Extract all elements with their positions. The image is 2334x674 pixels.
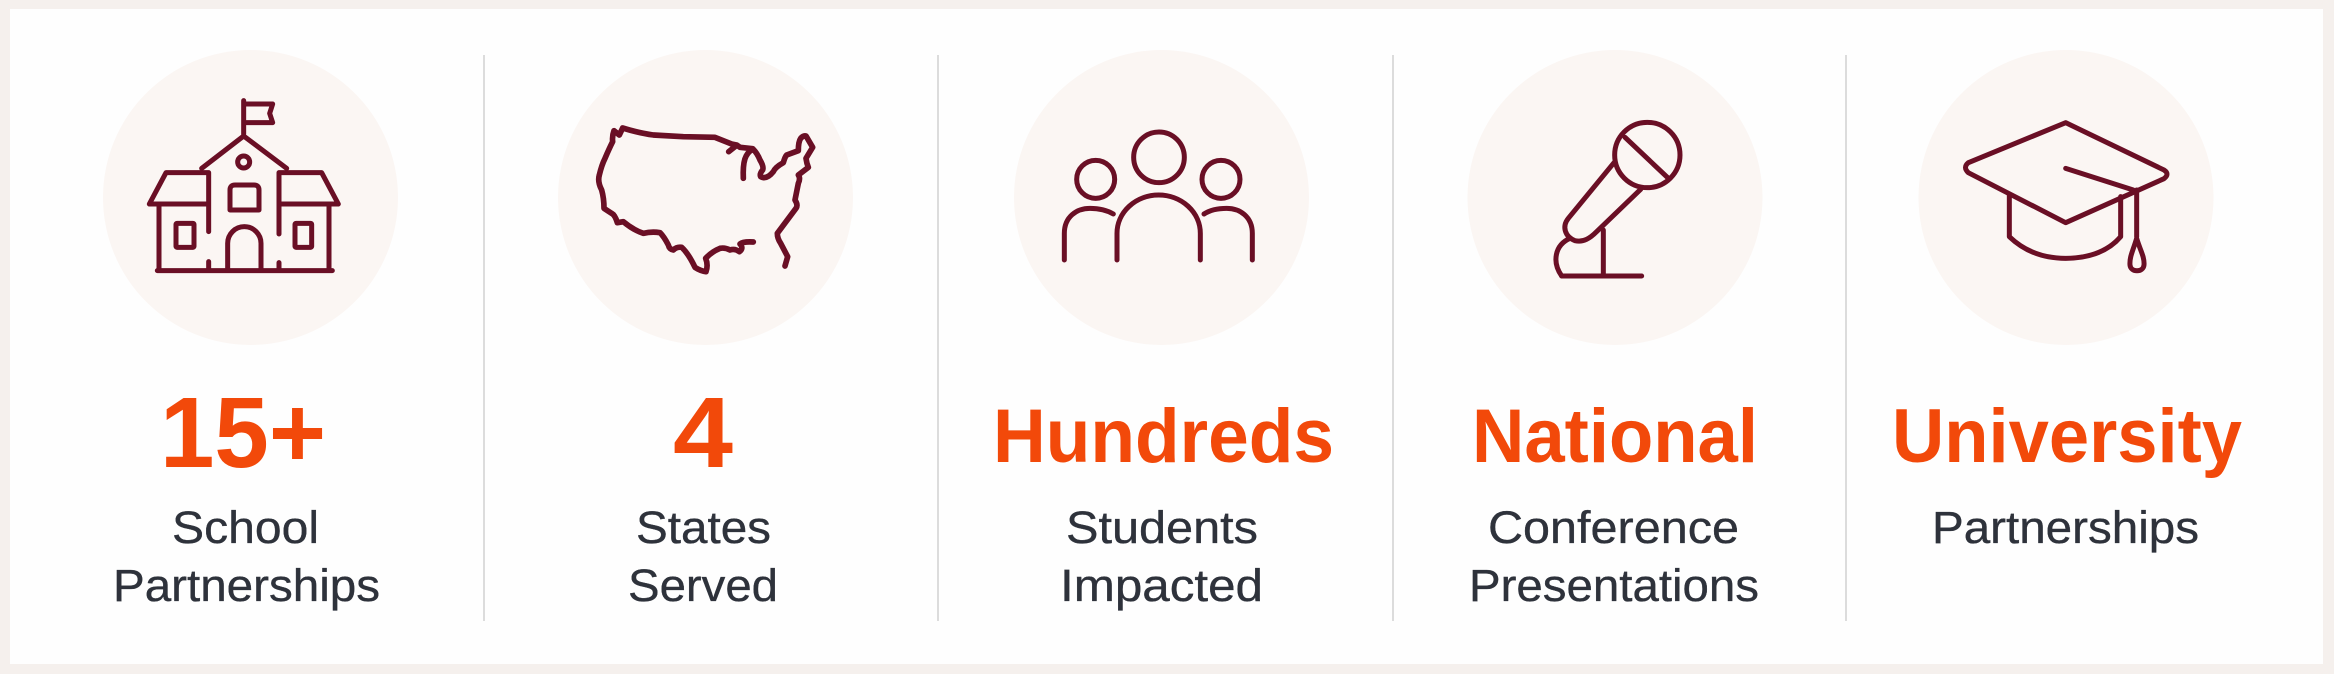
stat label: Conference Presentations: Presentations bbox=[1469, 560, 1759, 611]
icon circle: people bbox=[1014, 50, 1309, 345]
stat label: States Served: Served bbox=[628, 560, 778, 611]
stat value: University: University bbox=[1892, 394, 2242, 479]
icon circle: map bbox=[558, 50, 853, 345]
stat label: School Partnerships: School bbox=[172, 502, 319, 553]
icon: United States outline bbox=[599, 128, 813, 272]
icon circle: microphone bbox=[1468, 50, 1762, 345]
stat label: Conference Presentations: Conference bbox=[1488, 502, 1739, 553]
stat value: Hundreds: Hundreds bbox=[993, 394, 1334, 479]
stat label: Students Impacted: Impacted bbox=[1060, 560, 1263, 611]
icon: microphone on stand bbox=[1556, 122, 1680, 276]
icon: graduation cap bbox=[1965, 123, 2167, 271]
panel: students impacted bbox=[993, 50, 1334, 611]
panel: states served bbox=[558, 50, 853, 611]
stat label: School Partnerships: Partnerships bbox=[113, 560, 380, 611]
stat label: States Served: States bbox=[636, 502, 771, 553]
stat label: Students Impacted: Students bbox=[1066, 502, 1258, 553]
panel: conference presentations bbox=[1468, 50, 1762, 611]
panel: school partnerships bbox=[103, 50, 398, 611]
stat value: National: National bbox=[1472, 394, 1758, 479]
icon circle: graduation cap bbox=[1918, 50, 2214, 345]
stat value: 15+: 15+ bbox=[160, 377, 326, 489]
icon circle: school bbox=[103, 50, 398, 345]
panel: university partnerships bbox=[1892, 50, 2242, 553]
icon: school building with flag bbox=[149, 101, 338, 271]
stat value: 4: 4 bbox=[673, 377, 733, 489]
stat label: Partnerships: Partnerships bbox=[1932, 502, 2199, 553]
icon: group of three people bbox=[1064, 132, 1252, 260]
